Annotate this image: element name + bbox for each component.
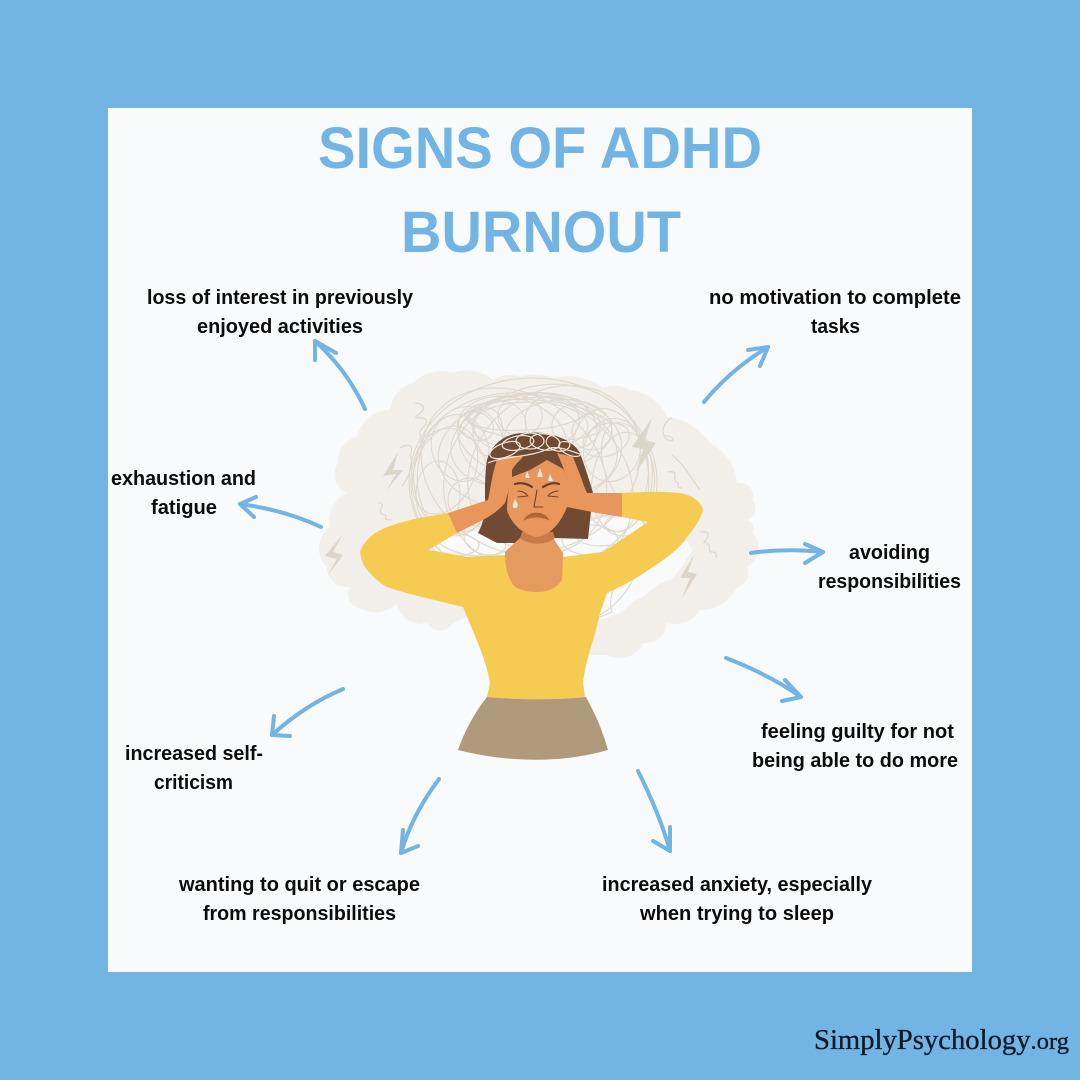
small squiggles <box>378 403 716 558</box>
label: avoiding responsibilities: responsibilities <box>818 571 961 593</box>
label: feeling guilty <box>752 721 958 772</box>
sweat and tears <box>513 468 553 508</box>
title: BURNOUT <box>401 200 681 265</box>
label: wanting to quit <box>178 874 420 925</box>
label: self-criticism: increased self- <box>125 743 263 765</box>
panel: white card <box>108 108 972 972</box>
label: increased anxiety <box>602 874 873 925</box>
label: no motivation: no motivation to complete <box>709 287 961 309</box>
scribble ball <box>390 351 677 617</box>
neck <box>505 538 563 592</box>
title <box>318 116 762 265</box>
label: exhaustion <box>111 468 256 519</box>
right hand and arm <box>557 453 622 517</box>
label: avoiding responsibilities: avoiding <box>849 542 930 564</box>
arrow: to exhaustion <box>240 497 321 527</box>
white gap under right arm <box>600 540 693 620</box>
skirt <box>458 697 608 760</box>
label: no motivation <box>709 287 961 338</box>
white gap between arms <box>428 515 650 560</box>
arrow: to feeling guilty <box>726 658 801 701</box>
label: exhaustion: fatigue <box>151 497 217 519</box>
label: self-criticism: criticism <box>154 772 233 794</box>
label: increased anxiety: when trying to sleep <box>639 903 834 925</box>
scribble over hair <box>488 432 583 463</box>
title: SIGNS OF ADHD <box>318 116 762 181</box>
arrow: to increased anxiety <box>638 771 670 851</box>
label: no motivation: tasks <box>811 316 860 338</box>
label: feeling guilty: feeling guilty for not <box>761 721 954 743</box>
lightning bolts <box>325 418 697 598</box>
mouth <box>525 513 548 519</box>
label: loss of interest <box>147 287 414 338</box>
arrow: to wanting to quit <box>401 779 439 853</box>
label: self-criticism <box>125 743 263 794</box>
label: wanting to quit: wanting to quit or escape <box>178 874 420 896</box>
label: wanting to quit: from responsibilities <box>203 903 396 925</box>
face <box>507 455 567 537</box>
arrow: to no motivation <box>704 347 768 402</box>
label: loss of interest: loss of interest in previously <box>147 287 414 309</box>
arrow: to self-criticism <box>272 689 343 736</box>
label: avoiding responsibilities <box>818 542 961 593</box>
brand: SimplyPsychology.org: SimplyPsychology.org <box>814 1025 1069 1056</box>
neck shadow <box>520 532 555 544</box>
arrow: to loss of interest <box>315 341 365 409</box>
left hand and arm <box>448 456 523 533</box>
label: feeling guilty: being able to do more <box>752 750 958 772</box>
shirt <box>360 492 703 699</box>
hair back <box>478 432 593 543</box>
eyebrows and eyes <box>515 483 559 507</box>
label: loss of interest: enjoyed activities <box>197 316 363 338</box>
label: exhaustion: exhaustion and <box>111 468 256 490</box>
hair fringe <box>512 447 565 477</box>
label: increased anxiety: increased anxiety, especially <box>602 874 873 896</box>
cloud background <box>319 370 759 658</box>
arrow: to avoiding responsibilities <box>751 544 823 563</box>
illustration: stressed woman with thought cloud <box>319 351 759 760</box>
